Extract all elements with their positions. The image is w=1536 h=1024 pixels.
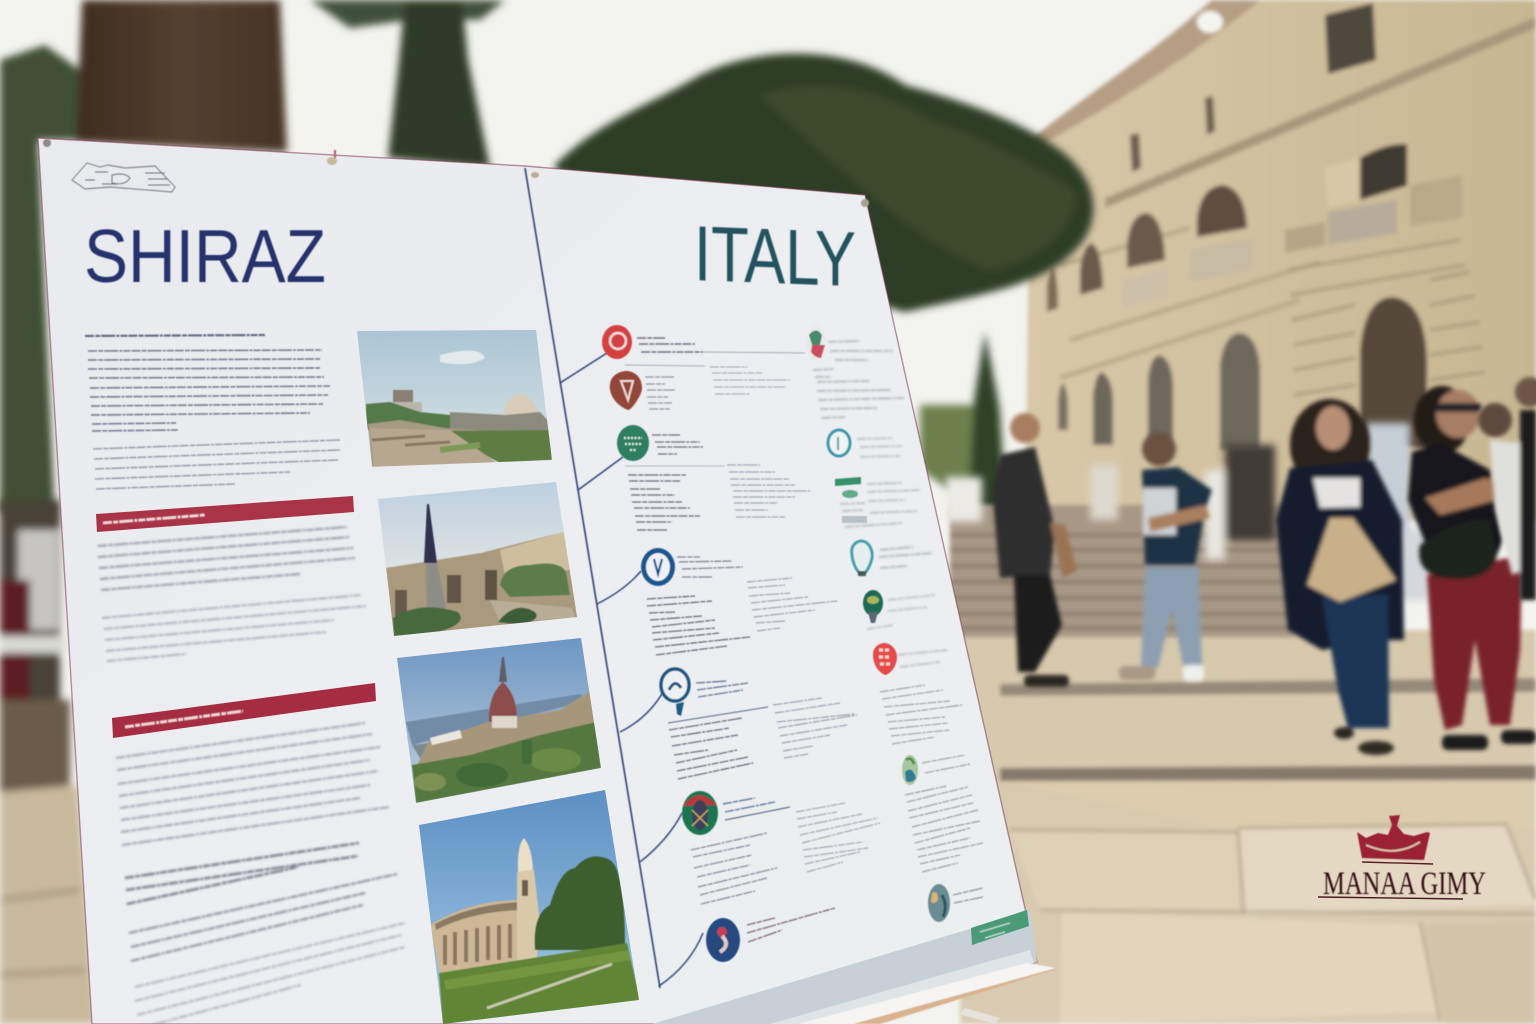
photo 2: tower and palace: [378, 482, 577, 636]
photo background: plaza ground and paving: [960, 630, 1536, 1024]
person: man in dark suit: [992, 413, 1077, 687]
icon: dark green bulb: [863, 590, 883, 623]
intro subheading: [85, 335, 265, 336]
rule after red emblem: [625, 352, 805, 366]
photo 1: Shiraz cityscape: [357, 330, 552, 467]
body under blue ring: [647, 596, 750, 655]
paragraph B: [102, 595, 366, 661]
notes beside navy ring: [773, 698, 857, 758]
caption: red emblem: [637, 338, 703, 352]
rule after green emblem: [625, 465, 725, 467]
icon: teal ring: [828, 430, 850, 456]
left panel: text under bar 1: [98, 527, 366, 661]
block under figure: [905, 786, 983, 872]
green footer tag: [971, 910, 1029, 945]
right column of right panel: icon captions: [813, 341, 947, 667]
logo wordmark: MANAA GIMY: [1323, 866, 1486, 902]
icon: globe: [928, 884, 950, 922]
stand foot: [958, 1008, 1000, 1024]
icon: blue ring: [641, 548, 675, 586]
caption: green label: [840, 483, 920, 527]
white stand bar: [798, 963, 1056, 1024]
rule after medallion: [725, 807, 790, 820]
notes beside medallion: [796, 803, 880, 872]
caption: brown pin: [645, 377, 675, 409]
icon: green emblem: [617, 425, 649, 461]
notes under green emblem: [727, 465, 810, 517]
icon: red badge: [873, 643, 897, 675]
footer hatch strip: [770, 950, 1034, 1024]
paragraph A: [98, 527, 355, 590]
intro paragraph: [88, 350, 330, 431]
small map sketch: [72, 163, 175, 192]
photo background: left side crowd and ground: [0, 500, 96, 1024]
paragraph E: [129, 874, 397, 961]
icon: flag emblem: [806, 326, 826, 360]
poster stand base: [798, 963, 1056, 1024]
stand underside: [848, 966, 1056, 1024]
heading: SHIRAZ: SHIRAZ: [84, 214, 326, 298]
caption: globe: [953, 888, 983, 903]
caption: dark green bulb: [867, 595, 935, 629]
logo rule top: [1362, 862, 1433, 864]
caption: flag emblem: [828, 341, 893, 360]
person: woman in red trousers: [1408, 386, 1536, 750]
caption: green emblem: [652, 435, 703, 454]
second paragraph: [93, 440, 340, 489]
icon: brown pin: [610, 371, 642, 410]
caption: teal pin: [879, 547, 933, 568]
lower right column text: [880, 685, 983, 903]
mounting pins: [43, 139, 869, 207]
caption: navy globe: [747, 908, 835, 942]
photo background: umbrella pine: [555, 54, 1093, 312]
poster sheet: [38, 138, 1037, 1024]
block under red badge: [880, 685, 962, 744]
logo mark: [1318, 815, 1486, 902]
icon: navy ring pin: [661, 669, 689, 716]
icon: teal pin: [852, 541, 872, 576]
body under green emblem: [628, 475, 700, 530]
person: woman with beige tote bag: [1276, 399, 1404, 755]
person: bystanders at right edge: [1478, 377, 1536, 600]
caption: green and blue figure: [922, 755, 970, 773]
heading: ITALY: ITALY: [694, 209, 856, 303]
left column of right panel: icon captions: [625, 338, 880, 942]
icon: green label: [835, 477, 867, 523]
body under navy ring: [669, 718, 753, 779]
vertical divider between panels: [525, 168, 660, 988]
faded paragraph F: [135, 923, 405, 1024]
left panel: intro text: [85, 335, 340, 489]
notes beside brown pin: [710, 367, 790, 394]
logo crown: [1357, 815, 1430, 860]
red section bar 1: [96, 496, 354, 532]
caption: navy ring pin: [696, 681, 748, 697]
icon: red emblem: [602, 325, 632, 359]
paragraph C: [116, 723, 389, 845]
grey footer band: [652, 911, 1037, 1024]
photo background: amphitheatre building: [1025, 0, 1536, 520]
photo background: trees left of the poster: [0, 0, 1006, 520]
caption: medallion: [723, 798, 775, 812]
logo rule bottom: [1318, 897, 1463, 899]
person: man in navy t-shirt: [1119, 432, 1212, 681]
photo 3: domed city by the sea: [390, 635, 605, 807]
caption: blue ring: [677, 557, 743, 577]
icon: green and blue figure: [902, 755, 918, 785]
body under medallion: [691, 833, 777, 904]
block under flag emblem: [813, 369, 905, 418]
notes under blue ring: [747, 578, 837, 631]
rule after navy ring: [668, 707, 768, 723]
caption: red badge: [898, 650, 947, 667]
red section bar 2: [112, 683, 376, 738]
poster board: [38, 138, 1037, 1024]
icon: navy globe with figure: [706, 918, 740, 962]
photo 4: cathedral and green field: [410, 785, 645, 1024]
left panel: text under bar 2: [116, 723, 405, 1024]
caption: teal ring: [857, 438, 902, 457]
connector lines from divider to icons: [560, 353, 703, 986]
dark paragraph D: [125, 843, 359, 904]
photo background: steps: [950, 505, 1295, 637]
photo background: distant crowd: [946, 423, 1430, 600]
icon: multicolour medallion: [682, 791, 718, 835]
